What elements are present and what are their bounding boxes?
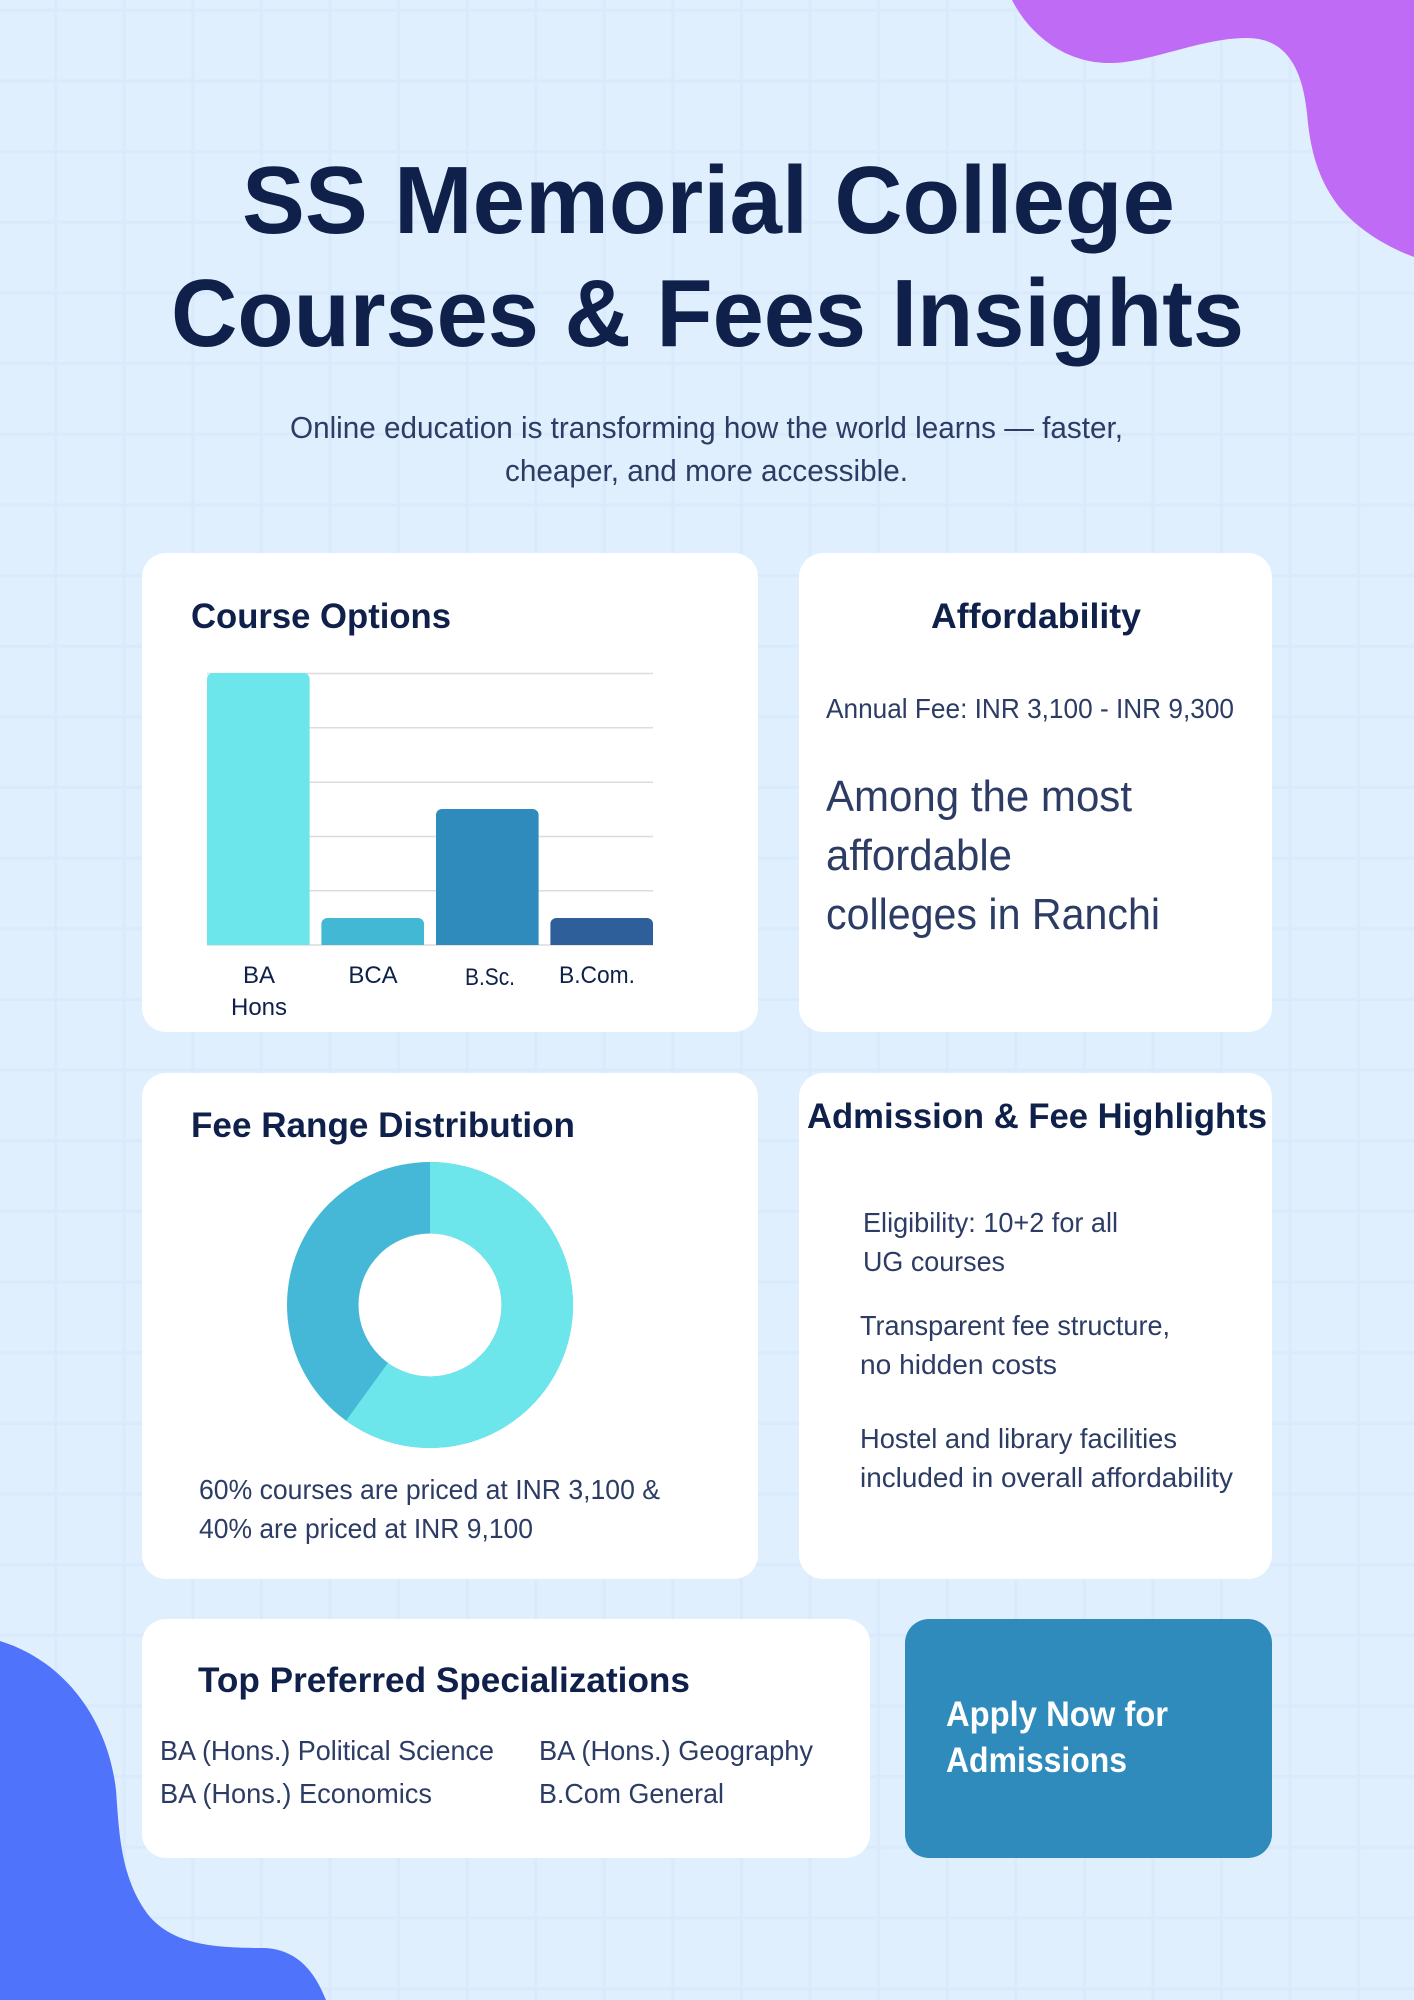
subtitle (290, 410, 1123, 488)
annual fee text: Annual Fee: INR 3,100 - INR 9,300 (826, 693, 1234, 724)
specialization list: B.Com General (539, 1778, 724, 1809)
highlight: transparent fees: Transparent fee structure, (860, 1310, 1170, 1341)
panel: top preferred specializations (142, 1619, 870, 1858)
donut caption: 40% are priced at INR 9,100 (199, 1513, 533, 1544)
title: Courses & Fees Insights (171, 260, 1244, 367)
highlight: facilities: Hostel and library facilities (860, 1423, 1177, 1454)
highlight: eligibility (863, 1207, 1118, 1277)
panel: fee range distribution (142, 1073, 758, 1579)
heading: fee range distribution: Fee Range Distribution (191, 1106, 575, 1145)
specialization list: BA (Hons.) Economics (160, 1778, 432, 1809)
specialization list: BA (Hons.) Political Science (160, 1735, 494, 1766)
decorative blob: purple top right (1012, 0, 1414, 257)
specialization list: BA (Hons.) Geography (539, 1735, 813, 1766)
affordability statement: Among the most (826, 772, 1132, 821)
bar chart: course options (207, 673, 653, 1021)
title (171, 147, 1244, 367)
panel: admission and fee highlights (799, 1073, 1272, 1579)
title: SS Memorial College (242, 147, 1175, 254)
call to action panel (905, 1619, 1272, 1858)
highlight: eligibility: Eligibility: 10+2 for all (863, 1207, 1118, 1238)
donut caption (199, 1474, 660, 1544)
decorative blob: blue bottom left (0, 1641, 326, 2000)
subtitle: cheaper, and more accessible. (505, 453, 908, 488)
call to action panel: Apply Now for (946, 1695, 1168, 1734)
panel: course options (142, 553, 758, 1032)
highlight: facilities (860, 1423, 1233, 1493)
bar chart: course options: BCA (348, 962, 398, 989)
bar chart: course options: Hons (231, 994, 287, 1021)
heading: affordability: Affordability (931, 597, 1142, 636)
highlight: eligibility: UG courses (863, 1246, 1005, 1277)
bar chart: course options: BA (243, 962, 275, 989)
bar chart: course options: B.Sc. (465, 964, 515, 991)
panel: affordability (799, 553, 1272, 1032)
highlight: transparent fees: no hidden costs (860, 1349, 1057, 1380)
heading: course options: Course Options (191, 597, 451, 636)
specialization list (160, 1735, 813, 1809)
affordability statement (826, 772, 1160, 939)
donut chart (287, 1162, 573, 1448)
heading: admission and fee highlights: Admission & Fee Highlights (807, 1097, 1267, 1136)
heading: top preferred specializations: Top Preferred Specializations (198, 1661, 690, 1700)
affordability statement: affordable (826, 831, 1012, 880)
subtitle: Online education is transforming how the world learns — faster, (290, 410, 1123, 445)
affordability statement: colleges in Ranchi (826, 890, 1160, 939)
highlight: facilities: included in overall affordability (860, 1462, 1233, 1493)
donut caption: 60% courses are priced at INR 3,100 & (199, 1474, 660, 1505)
call to action panel: Admissions (946, 1741, 1127, 1780)
bar chart: course options: B.Com. (559, 962, 635, 989)
highlight: transparent fees (860, 1310, 1170, 1380)
